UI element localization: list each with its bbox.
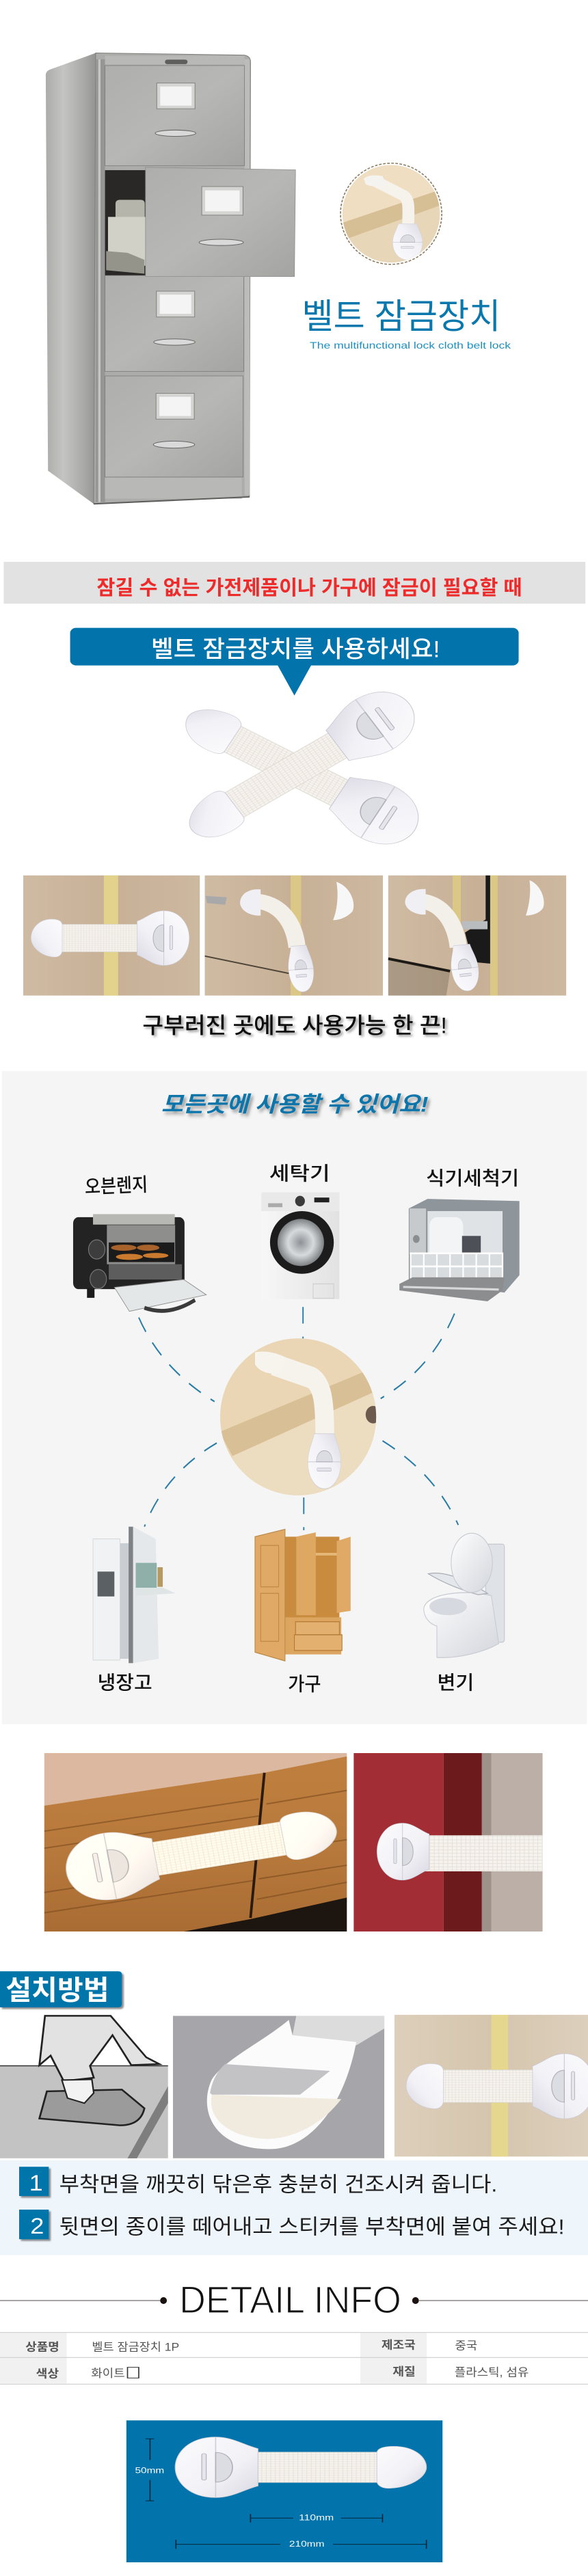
belt lock (175, 2437, 427, 2497)
section tag: installation (0, 1971, 122, 2007)
row: colour and material: 플라스틱, 섬유 (455, 2365, 529, 2378)
photo: lock on red cabinet (353, 1753, 543, 1931)
row: colour and material (36, 2365, 529, 2380)
instruction panel (0, 2160, 588, 2255)
step 1 badge (19, 2167, 49, 2196)
dimension: 210mm: 210mm (289, 2540, 324, 2549)
detail heading rule left (0, 2297, 167, 2304)
photo: adhesive backing (173, 2016, 384, 2158)
dimension: 110mm: 110mm (299, 2513, 334, 2523)
tag text: 설치방법 (5, 1975, 109, 2005)
label: oven range: 오븐렌지 (85, 1174, 148, 1198)
spec table (0, 2333, 588, 2384)
label: washing machine: 세탁기 (269, 1163, 330, 1184)
row: product name: 벨트 잠금장치 1P (92, 2340, 179, 2353)
photo: lock on wood drawers (44, 1753, 347, 1931)
row: product name: 제조국 (382, 2338, 416, 2351)
banner red text: 잠길 수 없는 가전제품이나 가구에 잠금이 필요할 때 (97, 576, 522, 599)
row: product name: 상품명 (25, 2340, 59, 2353)
dimension: 50mm (135, 2439, 164, 2501)
bubble text: 벨트 잠금장치를 사용하세요! (151, 636, 440, 662)
detail info section (0, 2279, 588, 2562)
illustration: wipe surface (0, 2016, 168, 2158)
photo: lock bent on drawer (204, 876, 383, 996)
installed photos (0, 1753, 588, 2255)
hero section (46, 53, 511, 504)
label: toilet: 변기 (438, 1672, 474, 1694)
two crossed belt locks (171, 679, 431, 856)
caption: 구부러진 곳에도 사용가능 한 끈! (142, 1014, 447, 1038)
step 2 text: 뒷면의 종이를 떼어내고 스티커를 부착면에 붙여 주세요! (59, 2215, 564, 2238)
dimension: 50mm: 50mm (135, 2466, 164, 2475)
row: colour and material: 재질 (392, 2365, 416, 2378)
icon: toilet (424, 1533, 505, 1657)
step 1 text: 부착면을 깨끗히 닦은후 충분히 건조시켜 줍니다. (59, 2173, 497, 2196)
usage panel (2, 1071, 587, 1724)
label: dishwasher: 식기세척기 (426, 1167, 519, 1189)
row: product name (25, 2338, 477, 2353)
icon: washing machine (261, 1193, 339, 1299)
dimension: 210mm (176, 2540, 427, 2549)
gray banner (3, 562, 585, 604)
panel heading: 모든곳에 사용할 수 있어요! (161, 1093, 428, 1117)
dimension diagram (126, 2420, 442, 2562)
row: product name: 중국 (455, 2339, 477, 2352)
row: colour and material: 화이트 (91, 2367, 125, 2380)
step 1 badge: 1 (29, 2171, 43, 2196)
icon: refrigerator (93, 1527, 176, 1663)
photo: lock straight across door (23, 876, 200, 996)
row: colour and material: 색상 (36, 2367, 59, 2380)
dimension: 110mm (250, 2513, 382, 2523)
icon: toaster oven (73, 1214, 206, 1312)
dashed connectors (139, 1307, 458, 1530)
label: furniture: 가구 (288, 1673, 321, 1695)
blue speech bubble (70, 628, 519, 696)
center lock photo (217, 1334, 381, 1500)
photo: lock bent on open drawer (388, 876, 566, 996)
icon: dishwasher (399, 1199, 520, 1301)
product title: 벨트 잠금장치 (302, 297, 500, 336)
detail heading: DETAIL INFO (179, 2279, 401, 2321)
product subtitle: The multifunctional lock cloth belt lock (310, 341, 511, 351)
filing cabinet illustration (46, 53, 295, 504)
photo: installed lock (395, 2015, 588, 2156)
step 2 badge (19, 2210, 49, 2239)
label: refrigerator: 냉장고 (98, 1672, 152, 1694)
icon: wardrobe (255, 1530, 351, 1661)
intro section (3, 562, 585, 1038)
round detail photo of lock on wood (338, 163, 446, 269)
step 2 badge: 2 (30, 2214, 44, 2239)
panel background (2, 1071, 587, 1724)
detail heading rule right (412, 2297, 588, 2304)
